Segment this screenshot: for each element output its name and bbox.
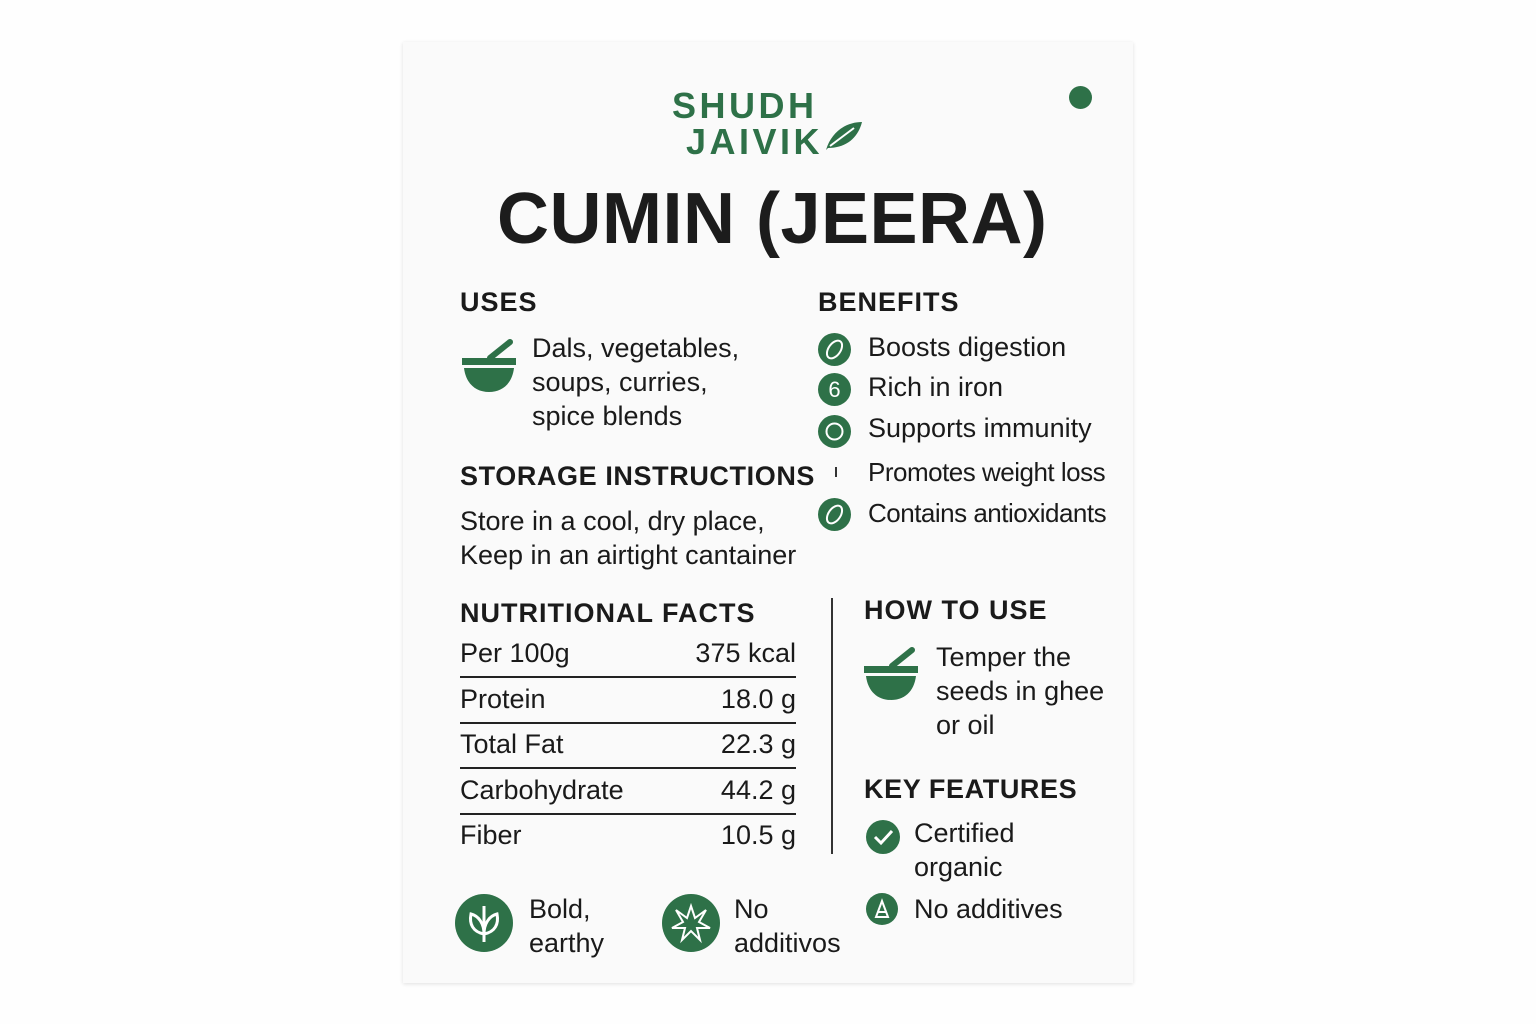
badge: no additivos: additivos	[734, 928, 841, 958]
storage text: Store in a cool, dry place,	[460, 506, 765, 536]
uses text	[532, 333, 739, 431]
uses heading: USES	[460, 287, 538, 317]
storage heading: STORAGE INSTRUCTIONS	[460, 461, 815, 491]
how to use text: seeds in ghee	[936, 676, 1104, 706]
how to use text	[936, 642, 1104, 740]
benefits list: Supports immunity	[868, 413, 1092, 443]
icon: bowl	[462, 339, 516, 392]
feature: certified: Certified	[914, 818, 1015, 848]
badge: no additivos: No	[734, 894, 769, 924]
uses text: Dals, vegetables,	[532, 333, 739, 363]
nutrition table: 10.5 g	[721, 820, 796, 850]
benefits list: Contains antioxidants	[868, 498, 1106, 528]
benefits list: 6	[828, 377, 841, 402]
badge: bold earthy: Bold,	[529, 894, 591, 924]
badge: bold earthy: earthy	[529, 928, 604, 958]
nutrition table: 22.3 g	[721, 729, 796, 759]
how to use text: or oil	[936, 710, 995, 740]
how to use text: Temper the	[936, 642, 1071, 672]
title: CUMIN (JEERA)	[497, 179, 1048, 259]
feature: certified	[866, 818, 1015, 882]
nutrition table: Fiber	[460, 820, 522, 850]
how to use heading: HOW TO USE	[864, 595, 1048, 625]
logo: JAIVIK	[686, 121, 823, 162]
benefits list: Promotes weight loss	[868, 457, 1105, 487]
nutrition table: Carbohydrate	[460, 775, 624, 805]
nutrition table: 44.2 g	[721, 775, 796, 805]
feature: no additives: No additives	[914, 894, 1063, 924]
nutrition table: Total Fat	[460, 729, 564, 759]
benefits list	[818, 332, 1106, 531]
icon: bowl 2	[864, 647, 918, 700]
nutrition table: Protein	[460, 684, 546, 714]
benefits list: Rich in iron	[868, 372, 1003, 402]
nutrition heading: NUTRITIONAL FACTS	[460, 598, 756, 628]
storage text: Keep in an airtight cantainer	[460, 540, 796, 570]
nutrition table: 375 kcal	[695, 638, 796, 668]
benefits heading: BENEFITS	[818, 287, 960, 317]
storage text	[460, 506, 796, 570]
uses text: soups, curries,	[532, 367, 708, 397]
feature: certified: organic	[914, 852, 1003, 882]
dot	[1069, 86, 1092, 109]
logo: SHUDH	[672, 85, 818, 126]
key features heading: KEY FEATURES	[864, 774, 1077, 804]
nutrition table: Per 100g	[460, 638, 570, 668]
nutrition table	[460, 638, 796, 850]
badge: no additivos	[662, 894, 841, 958]
benefits list: Boosts digestion	[868, 332, 1066, 362]
uses text: spice blends	[532, 401, 682, 431]
badge: bold earthy	[455, 894, 604, 958]
card	[403, 42, 1133, 983]
nutrition table: 18.0 g	[721, 684, 796, 714]
logo	[672, 85, 862, 162]
